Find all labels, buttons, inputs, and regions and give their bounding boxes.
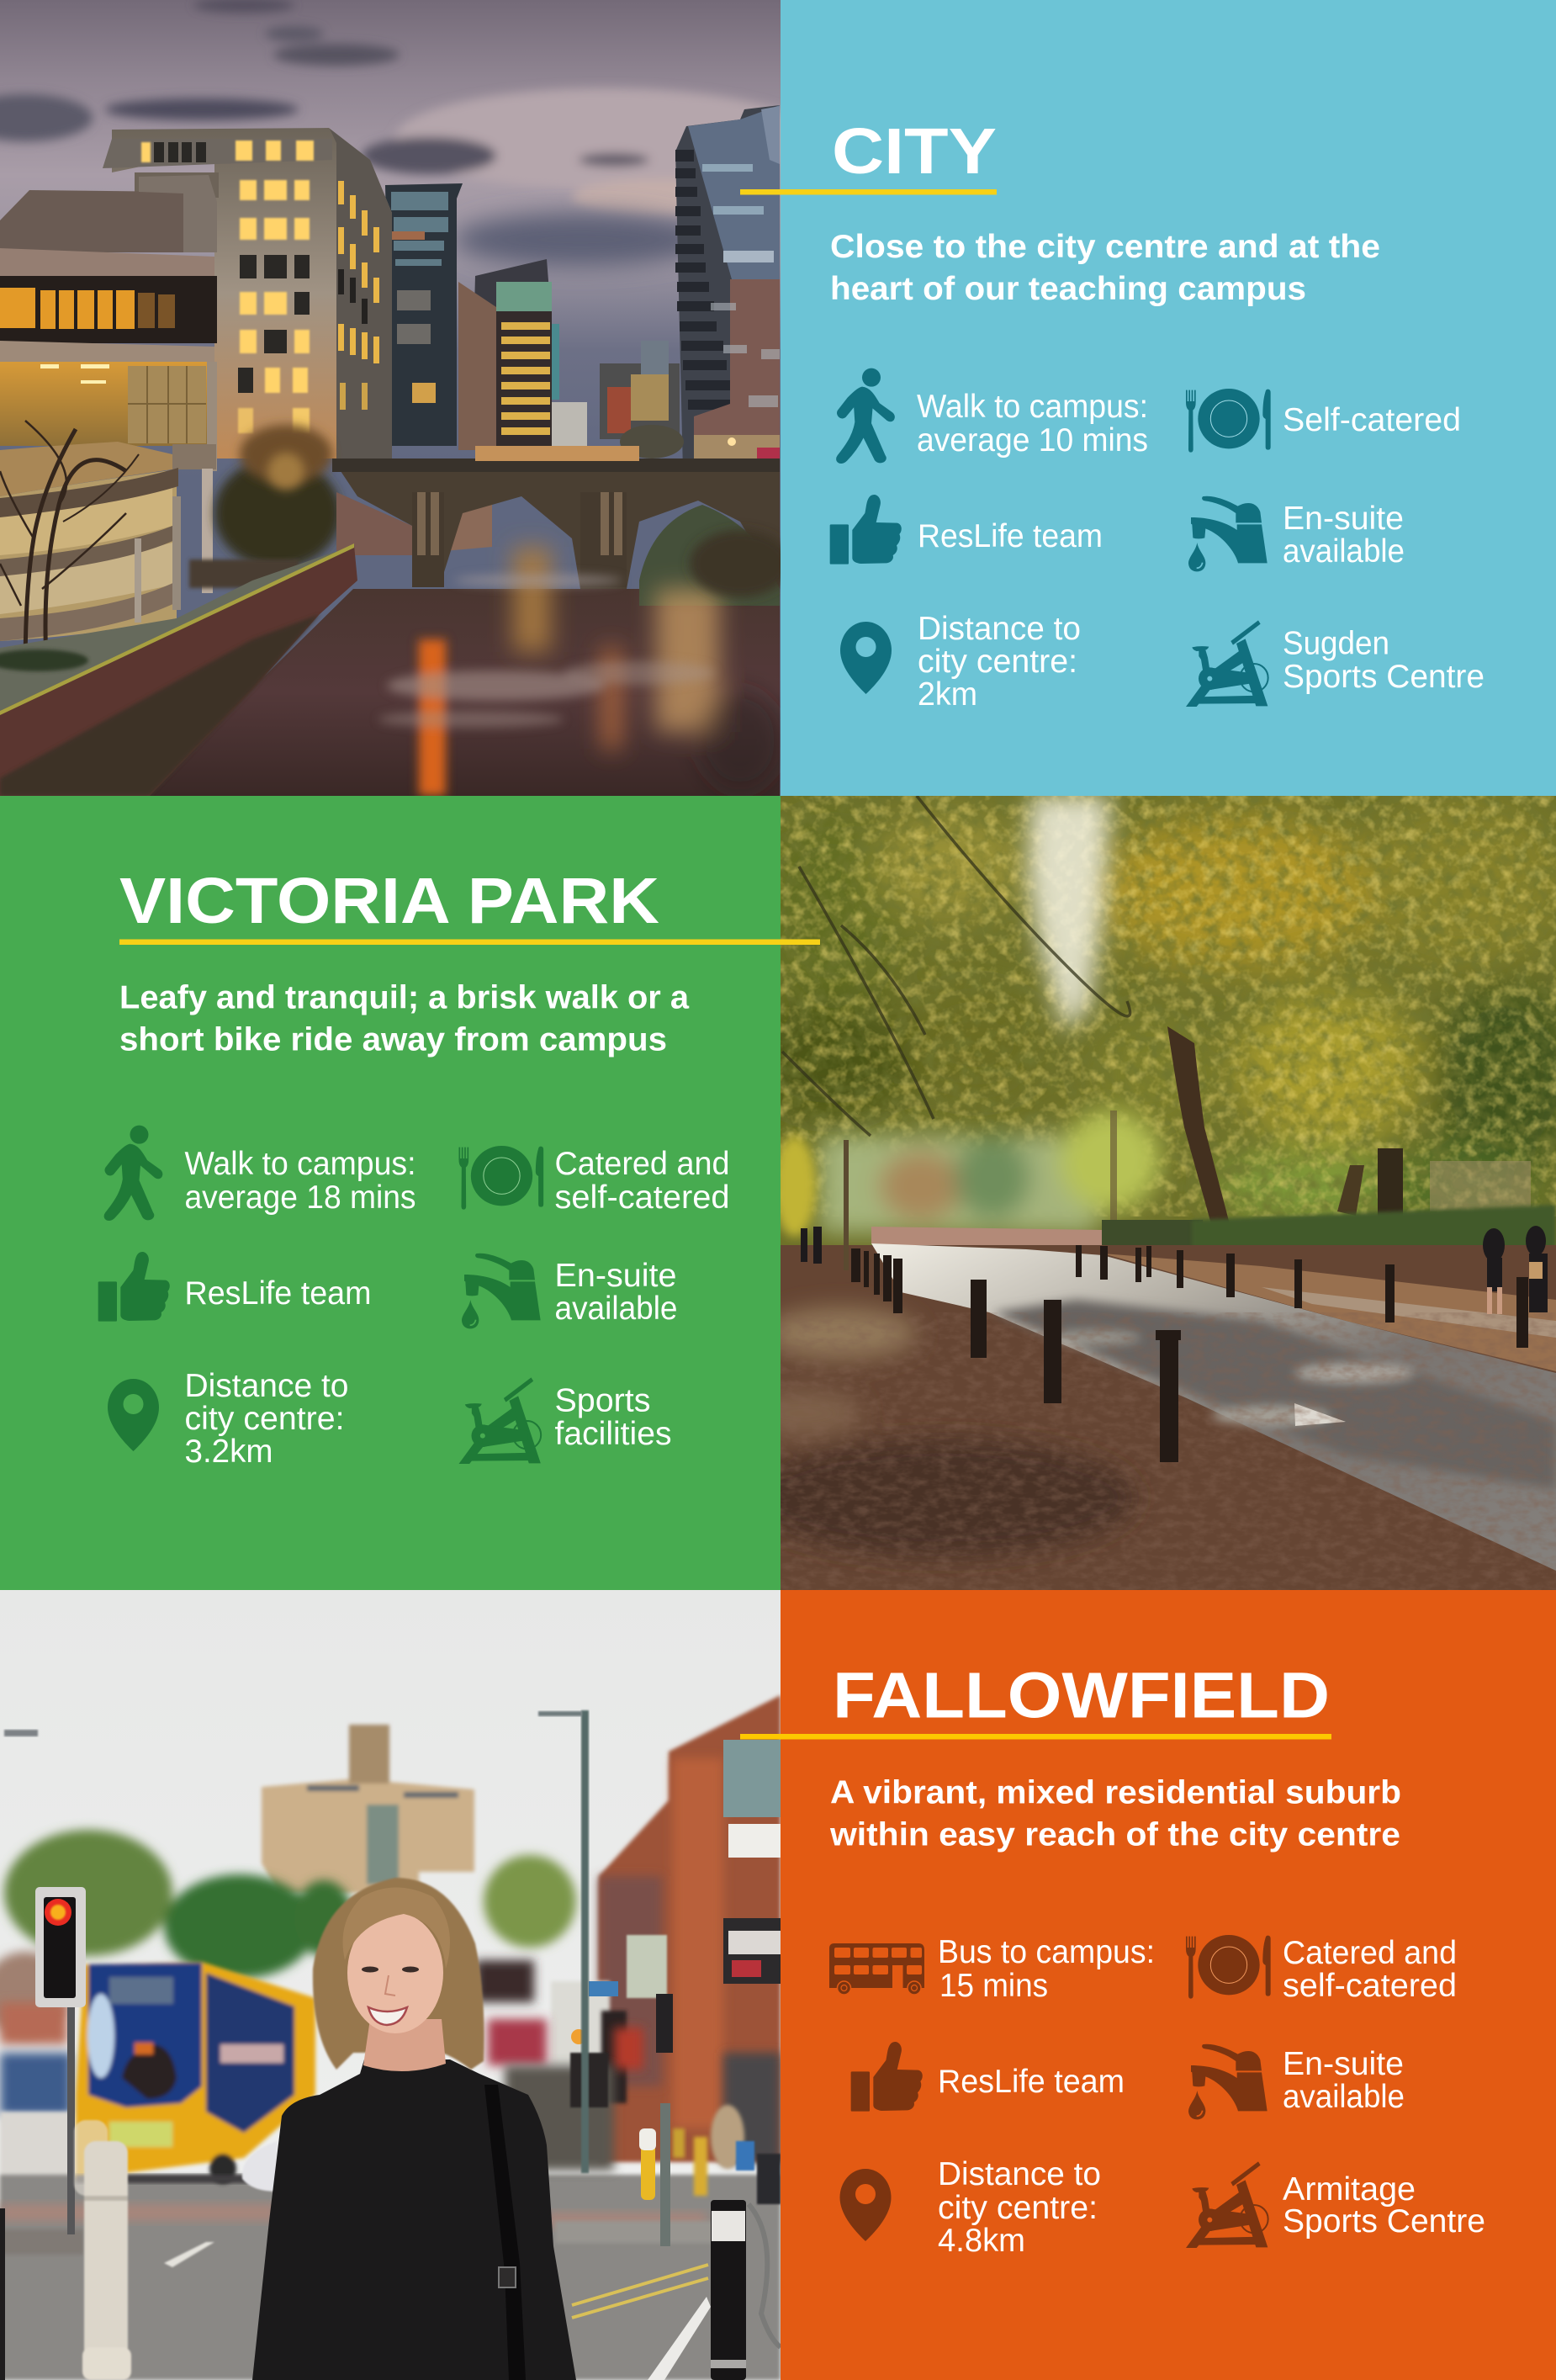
text: Sugden Sports Centre: Sports Centre bbox=[1283, 659, 1485, 695]
neck and face bbox=[363, 2019, 446, 2071]
bike and person bbox=[711, 2105, 744, 2169]
text: Sugden Sports Centre: Sugden bbox=[1283, 626, 1389, 661]
trunks bbox=[1167, 1026, 1230, 1224]
traffic light bbox=[35, 1887, 86, 2007]
text: en-suite available bbox=[1283, 2046, 1405, 2115]
sky gap bbox=[1028, 796, 1110, 1031]
icon: tap bbox=[1188, 496, 1268, 571]
yellow bollards and lines bbox=[641, 2128, 655, 2200]
distant blocks bbox=[600, 363, 680, 439]
text: distance to city centre bbox=[938, 2156, 1101, 2259]
text: bus to campus bbox=[938, 1934, 1155, 2004]
yellow rule: Fallowfield bbox=[740, 1734, 1331, 1740]
subheading: Fallowfield: within easy reach of the city centre bbox=[829, 1817, 1400, 1853]
texture on ground bbox=[781, 1312, 1556, 1590]
text: distance to city centre bbox=[918, 611, 1081, 713]
text: catered and self-catered bbox=[555, 1146, 730, 1216]
bus bbox=[76, 1962, 315, 2184]
text: Armitage Sports Centre: Armitage bbox=[1283, 2171, 1416, 2208]
black bollard bbox=[711, 2200, 746, 2380]
panel: City bbox=[740, 0, 1556, 796]
lit hall bbox=[0, 362, 207, 446]
text: en-suite available bbox=[1283, 501, 1405, 570]
column bbox=[202, 469, 213, 593]
white bollard bbox=[74, 2120, 131, 2380]
text: distance to city centre: 4.8km bbox=[938, 2223, 1025, 2259]
garden tree bbox=[214, 459, 341, 568]
text: distance to city centre: Distance to bbox=[938, 2156, 1101, 2192]
text: walk to campus bbox=[185, 1146, 415, 1216]
walkway bbox=[0, 545, 354, 711]
subheading: City bbox=[830, 229, 1380, 307]
right shops bbox=[599, 1695, 781, 2162]
text: en-suite available bbox=[555, 1258, 678, 1327]
text: en-suite available: En-suite bbox=[1283, 501, 1404, 537]
text: distance to city centre: 2km bbox=[918, 676, 977, 713]
icon: plate and cutlery bbox=[1186, 1935, 1271, 1999]
icon: map pin bbox=[108, 1379, 159, 1451]
text: sports facilities: Sports bbox=[555, 1383, 651, 1418]
text: en-suite available: available bbox=[555, 1291, 678, 1327]
text: distance to city centre: 3.2km bbox=[185, 1434, 273, 1470]
icon: exercise bike bbox=[458, 1377, 541, 1464]
icon: tap bbox=[462, 1254, 541, 1328]
hair back bbox=[313, 1878, 484, 2070]
icon: walking person bbox=[837, 368, 894, 463]
icon: map pin bbox=[840, 622, 892, 694]
icon: plate and cutlery bbox=[458, 1146, 543, 1210]
photo: tree-lined Victoria Park road bbox=[744, 796, 1556, 1590]
texture bbox=[781, 796, 1556, 1233]
text: catered and self-catered: Catered and bbox=[1283, 1935, 1457, 1971]
text: ResLife team: ResLife team bbox=[918, 518, 1103, 554]
text: en-suite available: En-suite bbox=[1283, 2046, 1404, 2082]
text: sports facilities: facilities bbox=[555, 1416, 671, 1452]
text: Armitage Sports Centre: Sports Centre bbox=[1283, 2203, 1485, 2240]
verge bbox=[1103, 1254, 1556, 1371]
text: walk to campus bbox=[917, 389, 1148, 459]
road bbox=[0, 2175, 781, 2380]
icon: thumbs up bbox=[830, 495, 902, 565]
right tower bbox=[675, 105, 780, 471]
text: bus to campus: 15 mins bbox=[939, 1968, 1048, 2004]
text: catered and self-catered: Catered and bbox=[555, 1146, 730, 1182]
icon: tap bbox=[1188, 2044, 1268, 2119]
photo: Manchester riverside at dusk bbox=[0, 0, 816, 796]
text: distance to city centre: city centre: bbox=[918, 644, 1077, 680]
distant haze trees bbox=[820, 1110, 1161, 1232]
woman: sweater bbox=[252, 2059, 576, 2380]
text: catered and self-catered: self-catered bbox=[1283, 1968, 1457, 2004]
subheading: City: heart of our teaching campus bbox=[830, 271, 1306, 307]
yellow rule: City bbox=[740, 189, 997, 195]
yellow-lit office bbox=[496, 311, 552, 446]
river base bbox=[150, 589, 780, 796]
branches bbox=[782, 796, 1130, 1136]
subheading: Victoria Park bbox=[119, 979, 689, 1058]
text: ResLife team: ResLife team bbox=[185, 1275, 372, 1312]
lamp post bbox=[581, 1710, 589, 2173]
text: en-suite available: available bbox=[1283, 2079, 1405, 2115]
text: distance to city centre: Distance to bbox=[185, 1368, 348, 1404]
street backdrop bbox=[0, 2002, 67, 2044]
text: walk to campus: Walk to campus: bbox=[185, 1146, 415, 1182]
subheading: Victoria Park: Leafy and tranquil; a brisk walk or a bbox=[119, 979, 689, 1016]
small traffic light bbox=[570, 2053, 608, 2107]
pink wall bbox=[871, 1227, 1103, 1255]
text: ResLife team: ResLife team bbox=[938, 2064, 1125, 2100]
text: en-suite available: En-suite bbox=[555, 1258, 676, 1294]
subheading: Victoria Park: short bike ride away from campus bbox=[119, 1021, 667, 1058]
heading: Fallowfield: FALLOWFIELD bbox=[833, 1659, 1330, 1731]
bridge bbox=[341, 472, 780, 589]
text: distance to city centre bbox=[185, 1368, 348, 1470]
text: en-suite available: available bbox=[1283, 533, 1405, 570]
icon: double-decker bus bbox=[829, 1943, 924, 1995]
text: bus to campus: Bus to campus: bbox=[938, 1934, 1155, 1970]
pink wall under bridge bbox=[336, 492, 412, 555]
bollards bbox=[851, 1245, 1528, 1462]
pedestrians bbox=[801, 1226, 1548, 1314]
icon: exercise bike bbox=[1186, 2161, 1268, 2248]
panel: Victoria Park bbox=[0, 796, 820, 1590]
icon: thumbs up bbox=[851, 2042, 923, 2112]
glass tower bbox=[385, 183, 463, 446]
text: Armitage Sports Centre bbox=[1283, 2171, 1485, 2240]
icon: exercise bike bbox=[1186, 620, 1268, 707]
hedge bbox=[1192, 1205, 1556, 1296]
panel: Fallowfield bbox=[740, 1590, 1556, 2380]
text: distance to city centre: Distance to bbox=[918, 611, 1081, 647]
text: distance to city centre: city centre: bbox=[938, 2190, 1098, 2226]
glass band bbox=[0, 248, 214, 278]
bag strap bbox=[484, 2085, 526, 2380]
main stone building bbox=[112, 128, 392, 459]
yellow rule: Victoria Park bbox=[119, 939, 820, 945]
tower bbox=[262, 1725, 474, 1893]
text: walk to campus: Walk to campus: bbox=[917, 389, 1148, 425]
text: distance to city centre: city centre: bbox=[185, 1401, 345, 1437]
brick wall bbox=[0, 545, 357, 796]
text: catered and self-catered bbox=[1283, 1935, 1457, 2004]
subheading: Fallowfield bbox=[829, 1775, 1401, 1853]
text: Sugden Sports Centre bbox=[1283, 626, 1485, 695]
text: walk to campus: average 18 mins bbox=[185, 1179, 415, 1216]
heading: Victoria Park: VICTORIA PARK bbox=[119, 865, 659, 937]
left concrete block bbox=[0, 190, 183, 252]
text: self-catered: Self-catered bbox=[1283, 402, 1461, 438]
trees bbox=[0, 1830, 576, 2036]
text: catered and self-catered: self-catered bbox=[555, 1179, 730, 1216]
heading: City: CITY bbox=[832, 115, 997, 188]
text: sports facilities bbox=[555, 1383, 671, 1452]
river reflections bbox=[513, 547, 782, 791]
text: walk to campus: average 10 mins bbox=[917, 422, 1148, 459]
subheading: City: Close to the city centre and at the bbox=[830, 229, 1380, 265]
icon: map pin bbox=[839, 2169, 892, 2241]
subheading: Fallowfield: A vibrant, mixed residential suburb bbox=[830, 1775, 1401, 1810]
ground leaves bbox=[781, 1245, 1556, 1590]
road bbox=[871, 1243, 1556, 1571]
cube tower bbox=[474, 259, 548, 307]
bare tree bbox=[0, 420, 140, 644]
icon: plate and cutlery bbox=[1186, 389, 1271, 453]
icon: walking person bbox=[105, 1126, 161, 1220]
spiral car park bbox=[0, 469, 177, 641]
icon: thumbs up bbox=[98, 1252, 170, 1322]
photo: student on Fallowfield high street bbox=[0, 1590, 781, 2380]
